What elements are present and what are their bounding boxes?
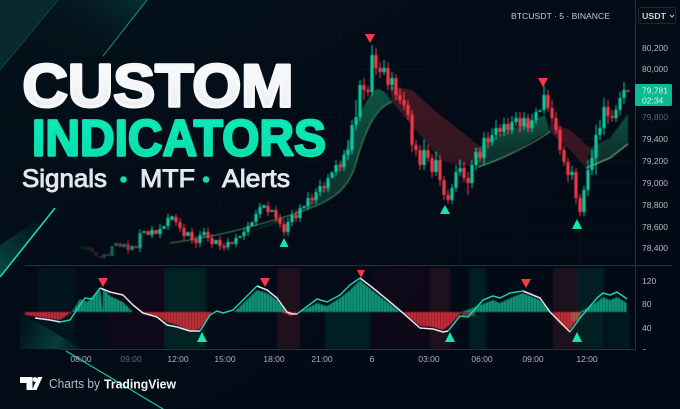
price axis labels: 80,200 [642,43,668,53]
currency selector: USDT [642,11,667,21]
price axis labels [642,43,668,253]
price axis labels: 79,400 [642,134,668,144]
moving average ribbons [170,86,628,243]
oscillator axis labels: 80 [642,299,652,309]
current price tag: 02:34 [642,96,664,106]
time axis labels: 12:00 [576,354,598,364]
time axis labels: 18:00 [263,354,285,364]
candlesticks [80,45,628,258]
title: custom: CUSTOM [22,52,294,120]
time axis labels: 09:00 [522,354,544,364]
time axis labels: 21:00 [311,354,333,364]
zone shading [38,268,630,349]
current price tag [635,84,672,106]
current price tag: 79,781 [642,86,668,96]
time axis labels: 09:00 [120,354,142,364]
chart grid [220,0,635,265]
charts by text: Charts by [49,377,101,391]
diagonal light beams top left [0,0,147,70]
oscillator axis labels: 40 [642,323,652,333]
subtitle: MTF [140,165,195,193]
subtitle: Alerts [222,165,290,193]
title: indicators: INDICATORS [32,110,326,166]
oscillator axis labels: 0 [642,347,647,357]
price axis labels: 79,800 [642,112,668,122]
time axis labels: 08:00 [70,354,92,364]
price axis labels: 78,400 [642,243,668,253]
histogram [25,280,627,331]
subtitle [22,165,290,193]
tradingview wordmark: TradingView [104,376,177,392]
oscillator line teal rising [60,278,627,332]
signal arrows on price chart [280,34,582,247]
oscillator axis labels: 120 [642,276,656,286]
subtitle: Signals [22,165,107,193]
time axis labels: 15:00 [214,354,236,364]
icon: TV mark [20,377,42,390]
diagonal light beam lower left [0,208,163,409]
price axis labels: 78,800 [642,200,668,210]
time axis labels: 12:00 [167,354,189,364]
price axis labels: 79,000 [642,178,668,188]
oscillator signal arrows [98,270,582,342]
price axis labels: 78,600 [642,222,668,232]
chart symbol label: BTCUSDT · 5 · BINANCE [511,11,610,21]
time axis labels: 06:00 [471,354,493,364]
currency selector [638,8,676,24]
time axis labels: 03:00 [418,354,440,364]
time axis labels [70,354,598,364]
price axis labels: 79,200 [642,156,668,166]
oscillator axis labels [642,278,656,350]
price axis labels: 80,000 [642,64,668,74]
oscillator line white falling [35,278,570,332]
oscillator panel [25,268,630,349]
time axis labels: 6 [370,354,375,364]
logo: TradingView [20,376,177,392]
main price chart [80,45,628,258]
